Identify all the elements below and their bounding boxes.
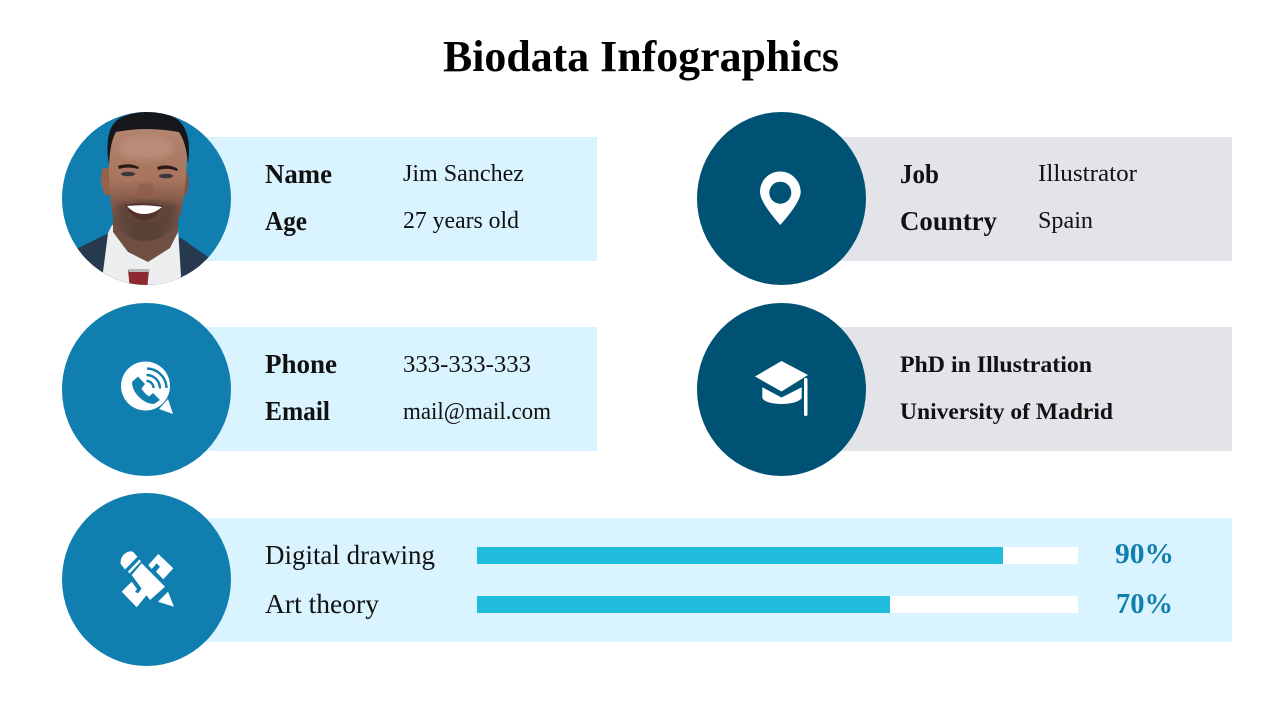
skill label: digital drawing: Digital drawing bbox=[265, 540, 435, 570]
value: age: 27 years old bbox=[403, 208, 519, 234]
portrait photo bbox=[60, 110, 235, 290]
skill bar: digital drawing bbox=[477, 547, 1078, 564]
circle with pencil and ruler icon bbox=[62, 493, 231, 666]
panel: job and country bbox=[830, 137, 1232, 261]
label: name: Name bbox=[265, 159, 332, 189]
panel: education bbox=[830, 327, 1232, 451]
panel: skills bbox=[200, 518, 1232, 642]
value: phone: 333-333-333 bbox=[403, 352, 531, 378]
label: job: Job bbox=[900, 159, 939, 189]
degree: PhD in Illustration bbox=[900, 352, 1092, 377]
value: job: Illustrator bbox=[1038, 161, 1137, 187]
panel: name and age bbox=[200, 137, 597, 261]
value: name: Jim Sanchez bbox=[403, 161, 524, 187]
icon: phone speech bubble bbox=[121, 362, 173, 414]
circle with graduation cap icon bbox=[697, 303, 866, 476]
value: email: mail@mail.com bbox=[403, 399, 551, 425]
circle with phone icon bbox=[62, 303, 231, 476]
label: email: Email bbox=[265, 396, 330, 426]
university: University of Madrid bbox=[900, 399, 1113, 424]
skill label: art theory: Art theory bbox=[265, 589, 380, 619]
circle with location pin icon bbox=[697, 112, 866, 285]
label: phone: Phone bbox=[265, 349, 337, 379]
icon: pencil and ruler bbox=[121, 551, 174, 607]
label: country: Country bbox=[900, 206, 997, 236]
skill bar: art theory bbox=[477, 596, 1078, 613]
label: age: Age bbox=[265, 206, 307, 236]
title: Biodata Infographics bbox=[443, 32, 839, 81]
icon: graduation cap bbox=[755, 361, 808, 416]
panel: phone and email bbox=[200, 327, 597, 451]
value: country: Spain bbox=[1038, 208, 1093, 234]
skill value: 90%: 90% bbox=[1115, 539, 1174, 570]
icon: location pin bbox=[760, 172, 801, 225]
skill value: 70%: 70% bbox=[1116, 589, 1173, 620]
